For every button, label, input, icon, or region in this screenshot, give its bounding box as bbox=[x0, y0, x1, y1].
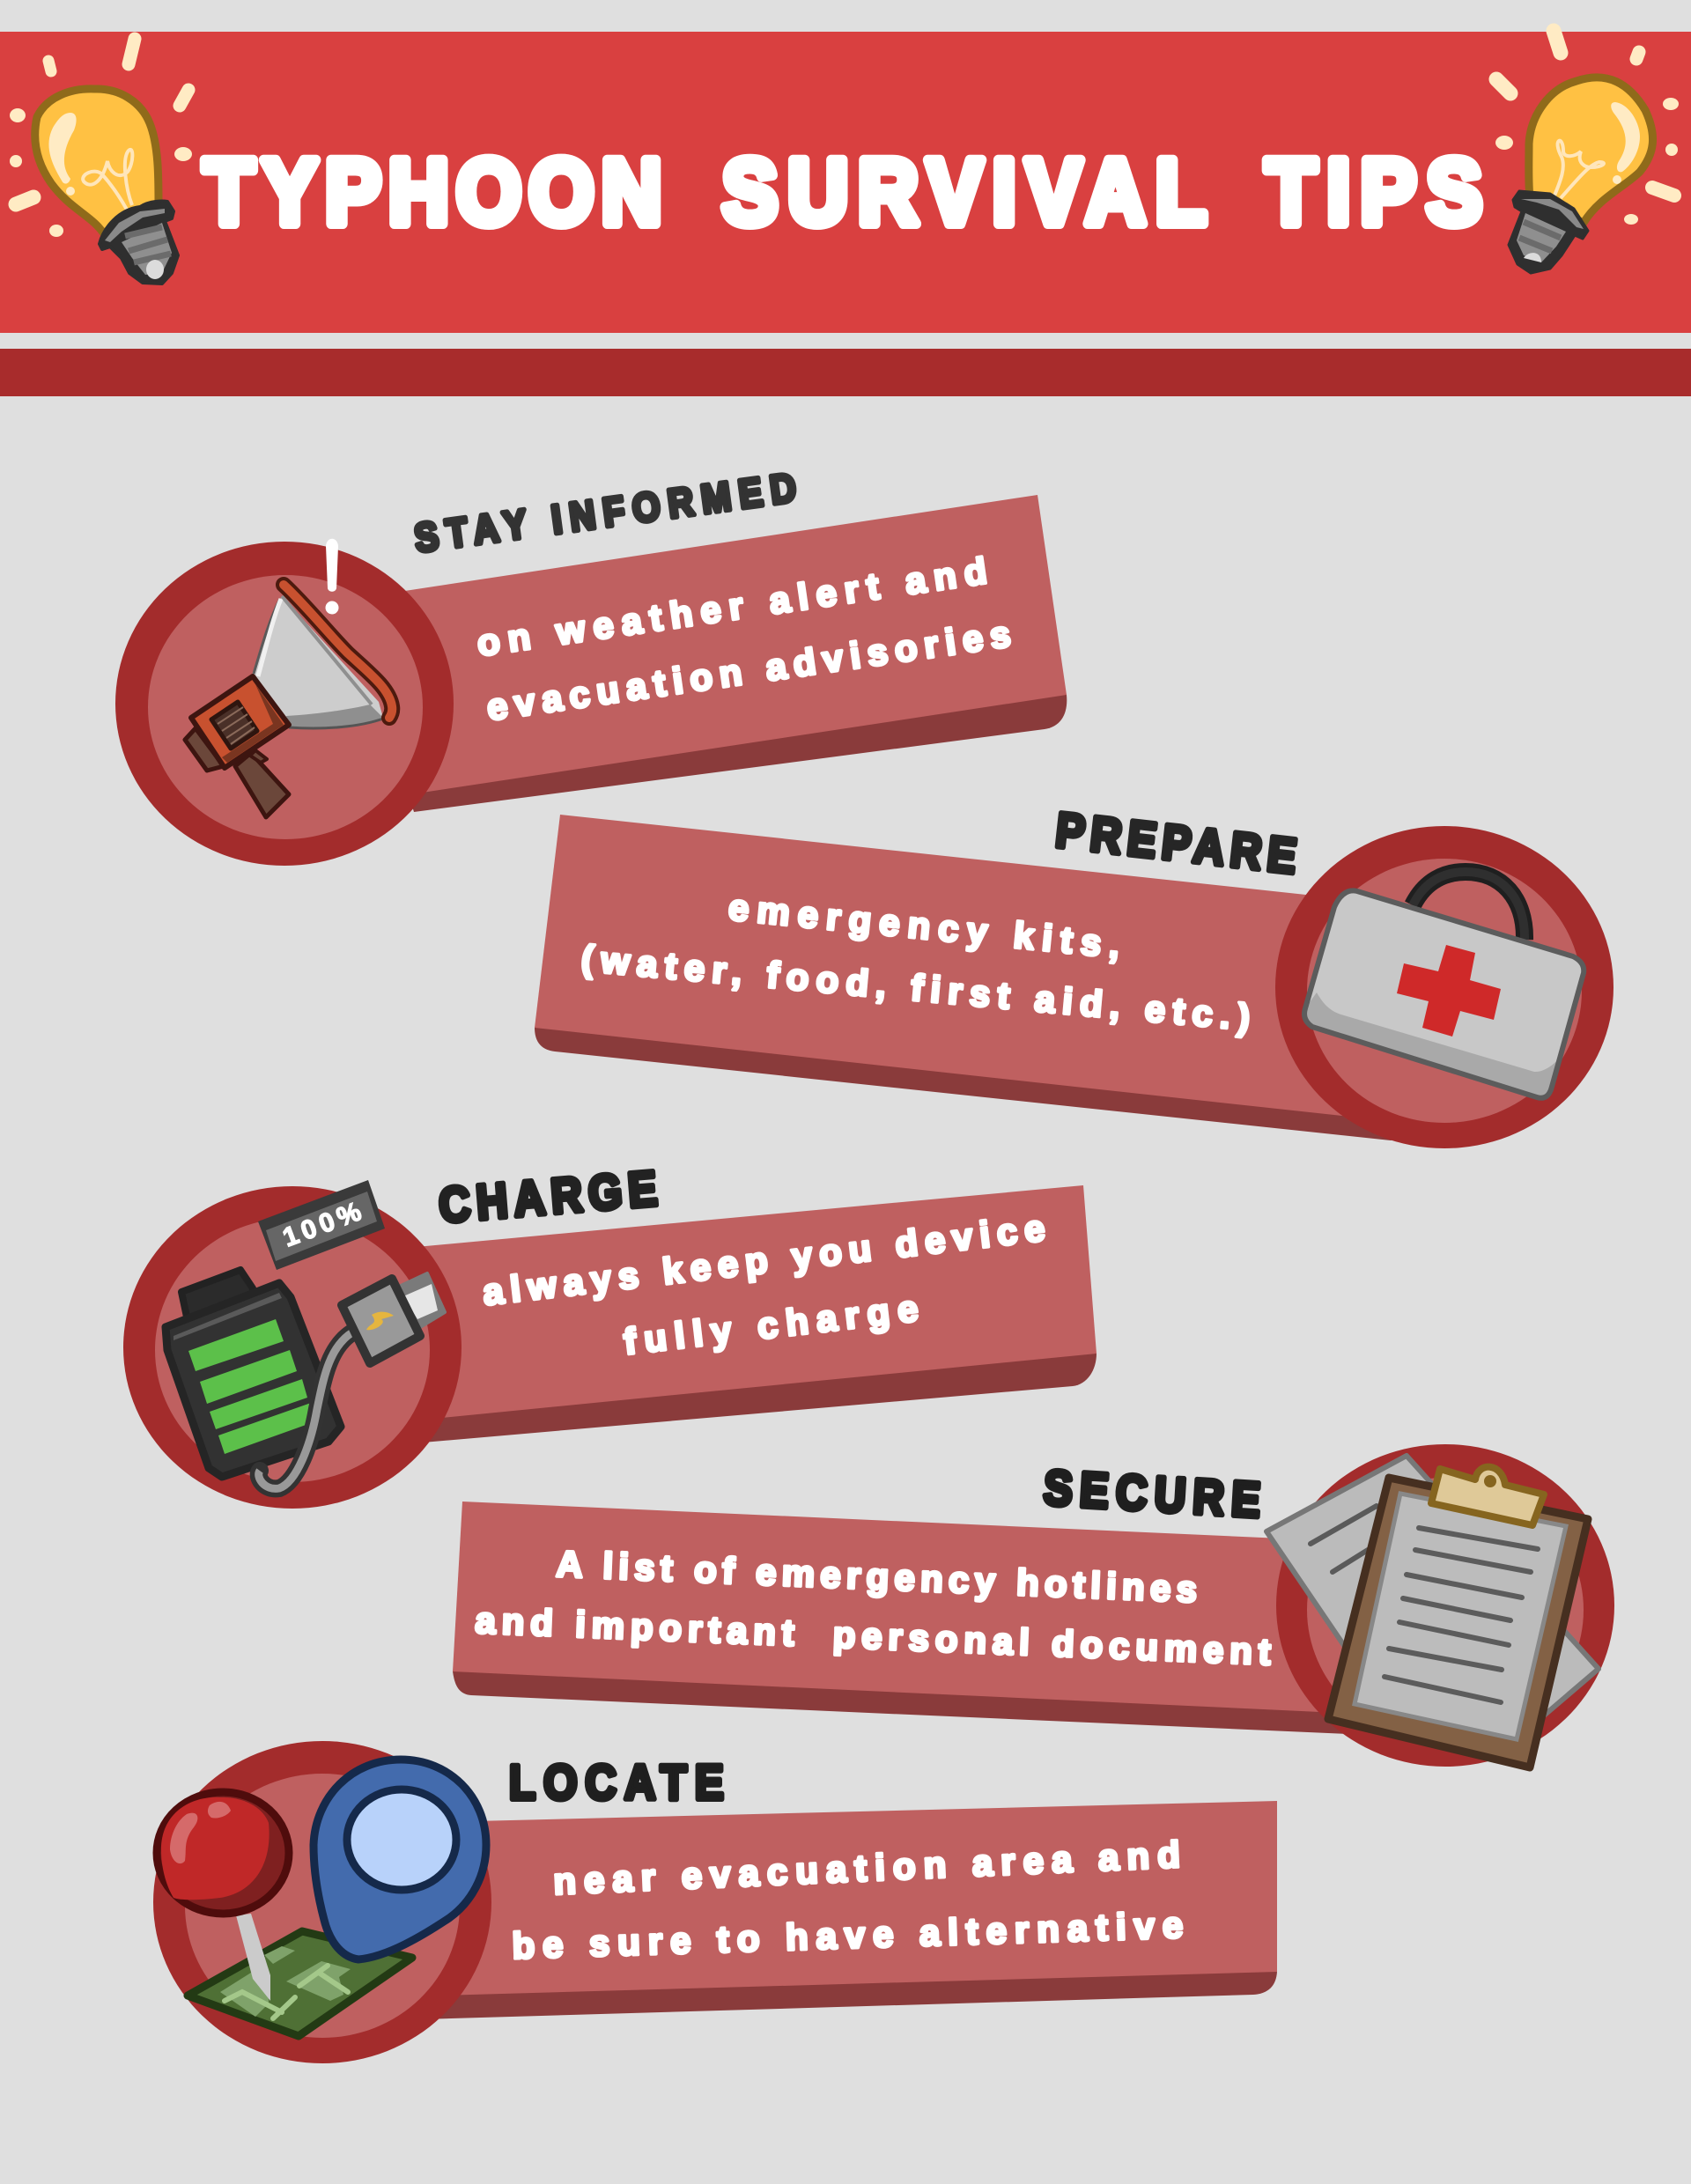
icon disc bbox=[1276, 1444, 1614, 1767]
banner shadow bbox=[414, 1339, 1097, 1442]
heading: secure: SECURE bbox=[1042, 1460, 1262, 1528]
heading: locate: LOCATE bbox=[509, 1755, 724, 1811]
banner shadow bbox=[423, 1964, 1277, 2019]
heading: prepare: PREPARE bbox=[1053, 802, 1299, 884]
body text bbox=[475, 1543, 1272, 1672]
banner bbox=[440, 1801, 1277, 1996]
panel: prepare bbox=[535, 802, 1613, 1148]
body text: A list of emergency hotlines bbox=[556, 1543, 1198, 1610]
body text bbox=[475, 550, 1013, 728]
body text: fully charge bbox=[622, 1288, 920, 1362]
body text: emergency kits, bbox=[727, 886, 1122, 965]
body text bbox=[481, 1206, 1047, 1362]
body text: (water, food, first aid, etc.) bbox=[580, 937, 1252, 1038]
banner bbox=[388, 1185, 1097, 1423]
icon disc bbox=[1275, 826, 1613, 1148]
icon disc bbox=[153, 1741, 491, 2063]
icon: 100% label bbox=[258, 1180, 385, 1270]
icon: blue location pin bbox=[314, 1760, 486, 1959]
title bbox=[203, 141, 1482, 244]
panel: secure bbox=[453, 1444, 1614, 1767]
title: TIPS bbox=[1266, 141, 1482, 244]
icon: back paper bbox=[1266, 1456, 1599, 1717]
heading: charge: CHARGE bbox=[437, 1161, 659, 1234]
panel: locate bbox=[153, 1741, 1277, 2063]
banner shadow bbox=[453, 1656, 1365, 1734]
icon disc bbox=[115, 542, 454, 866]
header lower stripe bbox=[0, 349, 1691, 396]
panel: charge bbox=[123, 1161, 1097, 1509]
body text: near evacuation area and bbox=[552, 1834, 1181, 1902]
icon: right light bulb bbox=[1495, 31, 1679, 273]
title: TYPHOON bbox=[203, 141, 661, 244]
icon: left light bulb bbox=[10, 39, 192, 284]
icon: battery bbox=[166, 1270, 341, 1477]
banner bbox=[453, 1502, 1339, 1713]
icon: megaphone bbox=[185, 585, 392, 817]
icon: 100% label: 100% bbox=[279, 1197, 366, 1253]
body text: always keep you device bbox=[481, 1206, 1047, 1313]
body text bbox=[512, 1834, 1184, 1966]
panel: stay informed bbox=[115, 466, 1067, 866]
body text: and important personal document bbox=[475, 1599, 1272, 1672]
banner shadow bbox=[535, 1013, 1409, 1140]
icon disc bbox=[123, 1186, 462, 1509]
body text: on weather alert and bbox=[475, 550, 989, 664]
body text bbox=[580, 886, 1252, 1038]
banner bbox=[388, 495, 1067, 798]
icon: first aid kit bbox=[1304, 872, 1584, 1098]
title: SURVIVAL bbox=[722, 141, 1207, 244]
heading: stay informed: STAY INFORMED bbox=[412, 466, 799, 562]
icon: clipboard bbox=[1328, 1467, 1588, 1767]
banner bbox=[535, 815, 1374, 1119]
banner shadow bbox=[405, 678, 1067, 812]
icon: red pin bbox=[157, 1792, 289, 2001]
body text: evacuation advisories bbox=[484, 613, 1013, 728]
icon: exclamation mark bbox=[326, 539, 338, 615]
body text: be sure to have alternative bbox=[512, 1904, 1184, 1966]
icon: map bbox=[188, 1931, 412, 2036]
icon: charging cable bbox=[259, 1273, 445, 1488]
header band bbox=[0, 32, 1691, 333]
